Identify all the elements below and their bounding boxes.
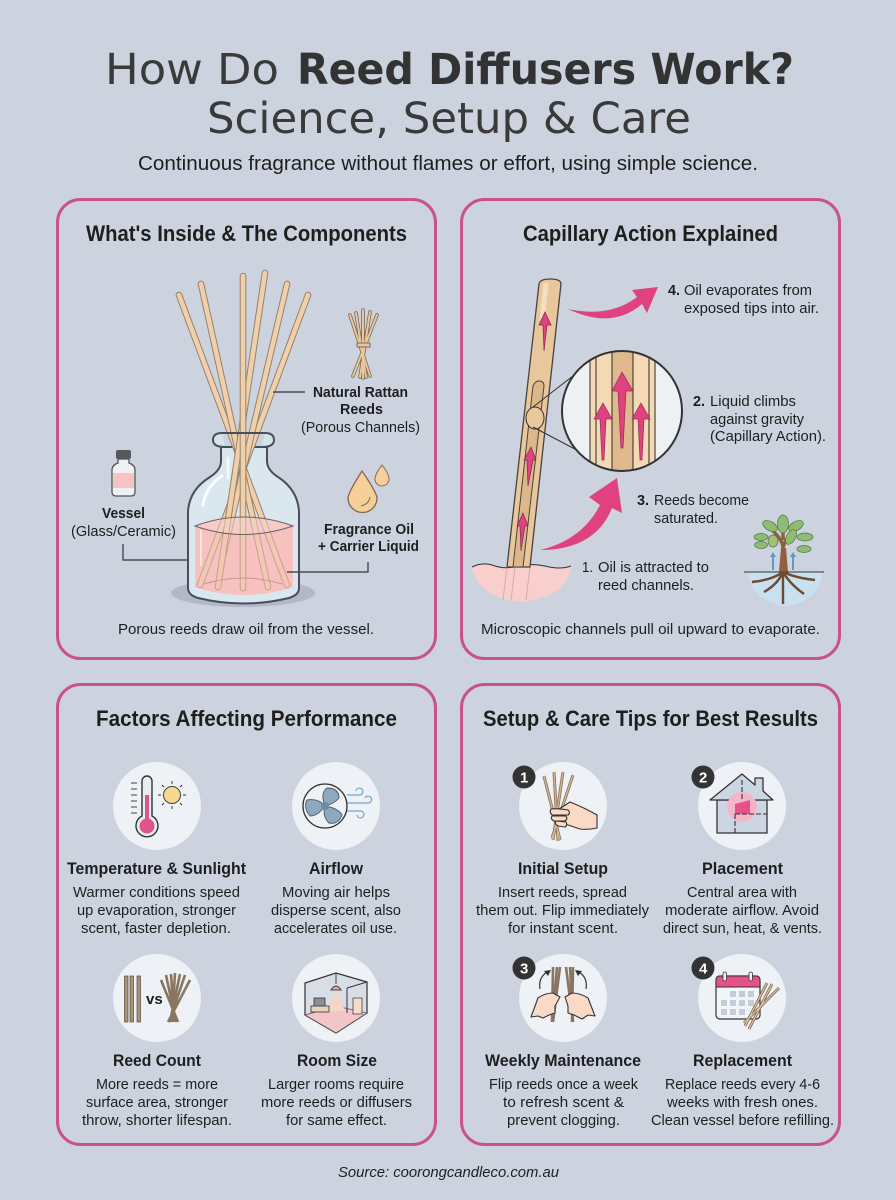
step 2 text: (Capillary Action). xyxy=(710,429,826,445)
callout: rattan reeds: (Porous Channels) xyxy=(301,420,420,436)
factor: airflow: Moving air helps xyxy=(282,885,390,901)
illustration: magnified reed channels xyxy=(533,350,682,472)
title: Reed Diffusers Work? xyxy=(297,46,794,95)
step 4 text: exposed tips into air. xyxy=(684,301,819,317)
callout: rattan reeds xyxy=(273,385,420,436)
icon: room xyxy=(292,954,380,1042)
factor: airflow: disperse scent, also xyxy=(271,903,401,919)
factor: room size xyxy=(261,1052,412,1129)
factor: temperature and sunlight: scent, faster depletion. xyxy=(81,921,231,937)
step 2 text: against gravity xyxy=(710,412,805,428)
icon: step 3 hands flipping reeds xyxy=(512,954,607,1042)
title: Science, Setup & Care xyxy=(207,95,691,144)
step 3 text: 3. xyxy=(637,493,649,509)
step 1 text: reed channels. xyxy=(598,578,694,594)
icon: thermometer and sun xyxy=(113,762,201,850)
tip: placement: direct sun, heat, & vents. xyxy=(663,921,822,937)
icon: reed count comparison: vs xyxy=(146,991,163,1008)
arrow: saturation xyxy=(540,478,622,550)
tip: initial setup: Insert reeds, spread xyxy=(498,885,627,901)
tip: replacement xyxy=(651,1052,834,1129)
tip: placement: Central area with xyxy=(687,885,797,901)
icon: small vessel bottle xyxy=(112,450,135,496)
step 4 text: Oil evaporates from xyxy=(684,283,812,299)
factor: room size: Room Size xyxy=(297,1052,377,1070)
icon: fan and airflow xyxy=(292,762,380,850)
factor: reed count: Reed Count xyxy=(113,1052,201,1070)
step 1 text: 1. xyxy=(582,560,593,576)
icon: oil drops xyxy=(348,465,389,512)
tip: weekly maintenance: to refresh scent & xyxy=(503,1095,624,1111)
tip: placement xyxy=(663,860,822,937)
callout: fragrance oil: Fragrance Oil xyxy=(324,522,414,538)
heading: capillary action: Capillary Action Explained xyxy=(523,221,778,246)
icon: step 4 calendar and reeds: 4 xyxy=(699,960,708,978)
caption: components: Porous reeds draw oil from the vessel. xyxy=(118,622,374,638)
icon: step 4 calendar and reeds xyxy=(692,954,786,1042)
illustration: oil pool xyxy=(472,564,571,602)
source credit: Source: coorongcandleco.com.au xyxy=(338,1165,559,1181)
factor: room size: Larger rooms require xyxy=(268,1077,404,1093)
heading: factors: Factors Affecting Performance xyxy=(96,706,397,731)
tip: weekly maintenance: Weekly Maintenance xyxy=(485,1052,641,1070)
tip: initial setup xyxy=(476,860,650,937)
factor: airflow xyxy=(271,860,401,937)
factor: temperature and sunlight xyxy=(67,860,246,937)
factor: room size: more reeds or diffusers xyxy=(261,1095,412,1111)
panel: factors affecting performance xyxy=(58,684,436,1144)
callout: vessel: (Glass/Ceramic) xyxy=(71,524,176,540)
factor: airflow: Airflow xyxy=(309,860,363,878)
step 2 text: 2. xyxy=(693,394,705,410)
factor: temperature and sunlight: Warmer conditions speed xyxy=(73,885,240,901)
factor: reed count: surface area, stronger xyxy=(86,1095,228,1111)
tip: weekly maintenance: Flip reeds once a week xyxy=(489,1077,639,1093)
tip: replacement: Clean vessel before refilling. xyxy=(651,1113,834,1129)
title: How Do xyxy=(105,46,279,95)
icon: step 1 hand holding reeds: 1 xyxy=(520,770,528,786)
icon: step 2 house placement: 2 xyxy=(699,770,707,786)
tip: initial setup: for instant scent. xyxy=(508,921,618,937)
step 1 text xyxy=(582,560,709,594)
icon: tree capillary analogy xyxy=(744,515,824,606)
factor: room size: for same effect. xyxy=(286,1113,387,1129)
heading: components: What's Inside & The Components xyxy=(86,221,407,246)
callout: rattan reeds: Natural Rattan xyxy=(313,385,408,401)
tip: replacement: weeks with fresh ones. xyxy=(666,1095,818,1111)
step 3 text: Reeds become xyxy=(654,493,749,509)
illustration: diffuser bottle with reeds xyxy=(171,273,315,607)
title xyxy=(105,46,794,144)
tip: initial setup: them out. Flip immediately xyxy=(476,903,650,919)
step 2 text xyxy=(693,394,826,445)
subtitle: Continuous fragrance without flames or effort, using simple science. xyxy=(138,152,758,175)
icon: reed count comparison xyxy=(113,954,201,1042)
factor: temperature and sunlight: Temperature & Sunlight xyxy=(67,860,246,878)
panel: what's inside and the components xyxy=(58,200,436,658)
step 3 text xyxy=(637,493,749,527)
tip: placement: moderate airflow. Avoid xyxy=(665,903,819,919)
callout: fragrance oil xyxy=(287,522,419,572)
icon: step 3 hands flipping reeds: 3 xyxy=(520,960,528,978)
caption: capillary action: Microscopic channels pull oil upward to evaporate. xyxy=(481,622,820,638)
heading: setup and care: Setup & Care Tips for Best Results xyxy=(483,706,818,731)
callout: rattan reeds: Reeds xyxy=(340,402,383,418)
arrows: reed flow xyxy=(517,312,551,551)
factor: temperature and sunlight: up evaporation, stronger xyxy=(77,903,236,919)
factor: airflow: accelerates oil use. xyxy=(274,921,397,937)
callout: vessel xyxy=(71,506,188,560)
step 2 text: Liquid climbs xyxy=(710,394,796,410)
callout: vessel: Vessel xyxy=(102,506,145,522)
tip: weekly maintenance: prevent clogging. xyxy=(507,1113,620,1129)
step 4 text xyxy=(668,283,819,317)
tip: placement: Placement xyxy=(702,860,783,878)
arrow: evaporation xyxy=(568,287,658,318)
tip: initial setup: Initial Setup xyxy=(518,860,608,878)
illustration: single reed xyxy=(507,279,561,567)
factor: reed count: throw, shorter lifespan. xyxy=(82,1113,232,1129)
step 3 text: saturated. xyxy=(654,511,718,527)
factor: reed count: More reeds = more xyxy=(96,1077,218,1093)
panel: capillary action explained xyxy=(462,200,840,658)
step 1 text: Oil is attracted to xyxy=(598,560,709,576)
icon: step 1 hand holding reeds xyxy=(512,762,607,850)
tip: replacement: Replacement xyxy=(693,1052,792,1070)
callout: fragrance oil: + Carrier Liquid xyxy=(318,539,419,555)
tip: replacement: Replace reeds every 4-6 xyxy=(665,1077,820,1093)
factor: reed count xyxy=(82,1052,232,1129)
panel: setup and care tips xyxy=(462,684,840,1144)
icon: step 2 house placement xyxy=(692,762,786,850)
step 4 text: 4. xyxy=(668,283,680,299)
icon: reed bundle xyxy=(350,310,377,378)
tip: weekly maintenance xyxy=(485,1052,641,1129)
